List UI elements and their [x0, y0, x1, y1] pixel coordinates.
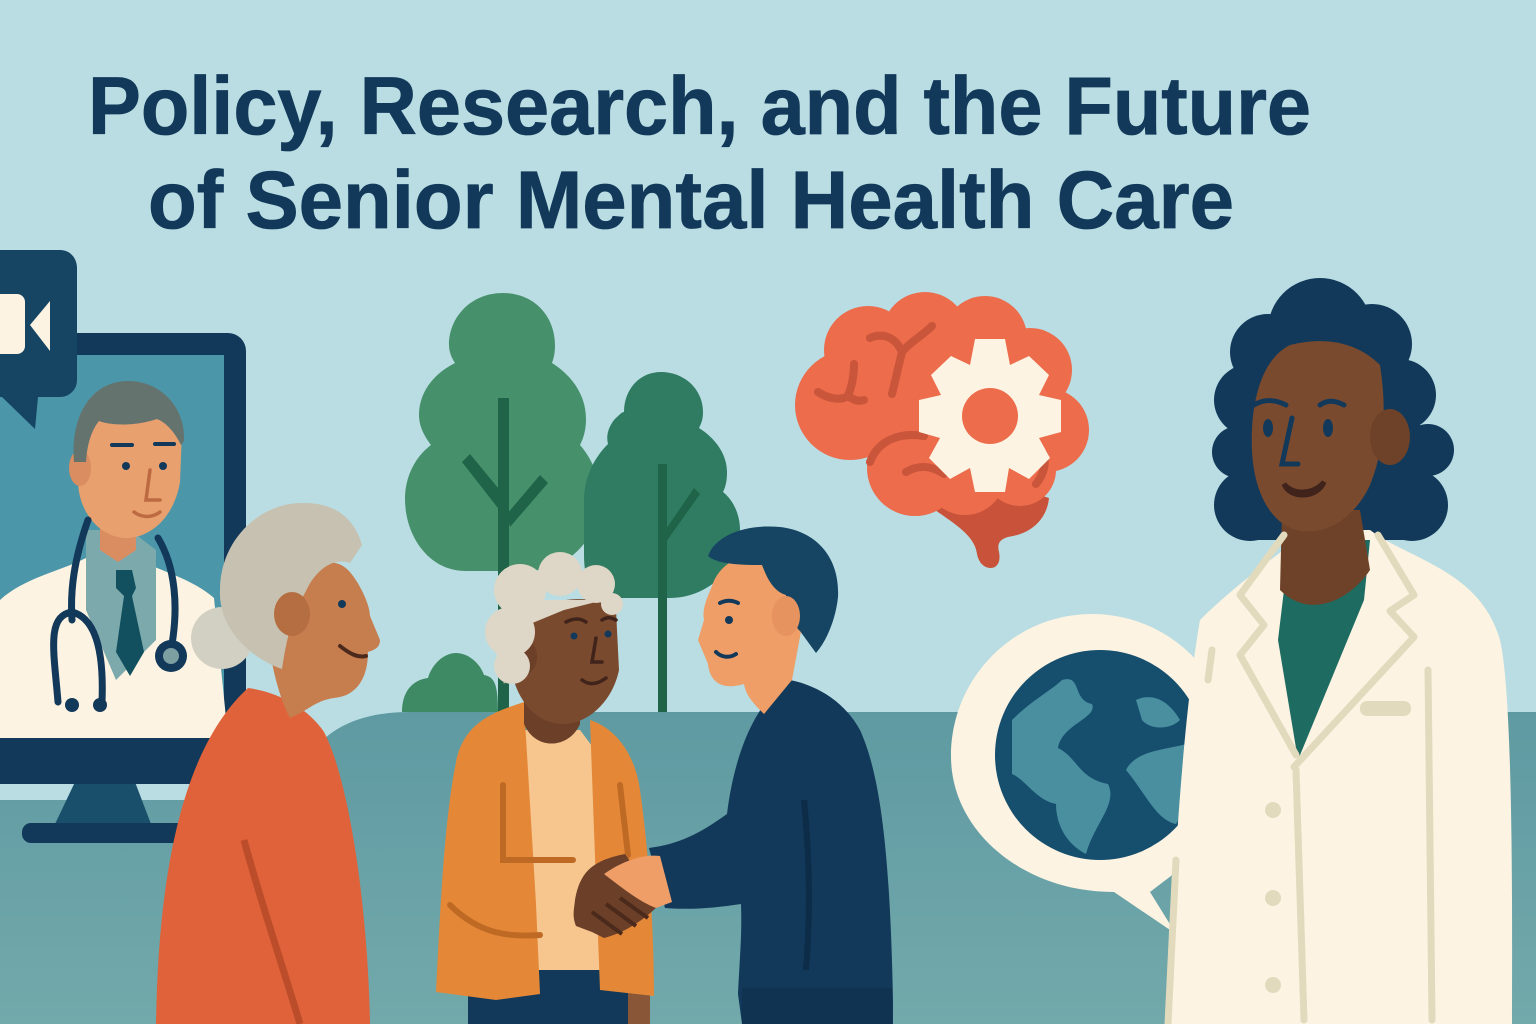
title: of Senior Mental Health Care: [148, 155, 1234, 246]
senior woman in orange: [156, 503, 380, 1024]
video call speech bubble icon: [0, 250, 77, 429]
globe speech bubble: [951, 614, 1234, 934]
cane: [626, 960, 650, 1024]
ground: [0, 712, 1536, 1024]
man in navy: [649, 526, 893, 1024]
handshake: [574, 854, 672, 938]
brain icon with gear: [795, 292, 1089, 568]
title: Policy, Research, and the Future: [88, 61, 1311, 152]
senior woman with cardigan: [436, 552, 654, 1024]
title: [88, 61, 1311, 246]
doctor with coat: [1168, 278, 1512, 1024]
doctor on screen: [0, 381, 228, 738]
monitor with video call doctor: [0, 333, 246, 843]
trees: [402, 293, 740, 712]
